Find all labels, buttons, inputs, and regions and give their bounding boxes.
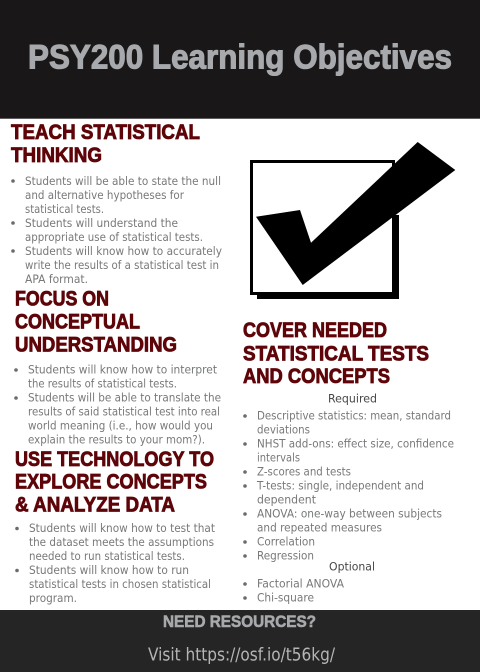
heading: cover needed statistical tests and concepts: STATISTICAL TESTS: [243, 342, 429, 366]
bullet list: statistical thinking objectives: write the results of a statistical test in: [25, 258, 219, 272]
subheading: optional: Optional: [329, 560, 375, 574]
bullet list: statistical thinking objectives: [11, 174, 222, 286]
bullet list: technology objectives: the dataset meets the assumptions: [29, 535, 214, 549]
bullet list: required topics: T-tests: single, independent and: [256, 478, 424, 492]
bullet list: required topics: [243, 408, 454, 562]
bullet list: conceptual understanding objectives: Students will know how to interpret: [28, 362, 217, 376]
bullet list: technology objectives: [15, 521, 215, 605]
bullet list: conceptual understanding objectives: world meaning (i.e., how would you: [28, 418, 213, 432]
bullet list: technology objectives: statistical tests in chosen statistical: [29, 577, 211, 591]
bullet list: conceptual understanding objectives: [14, 362, 221, 446]
bullet list: optional topics: Factorial ANOVA: [257, 576, 344, 590]
bullet list: required topics: dependent: [257, 492, 316, 506]
icon: checked box: [252, 142, 455, 299]
heading: use technology: EXPLORE CONCEPTS: [15, 470, 207, 494]
bullet list: optional topics: Chi-square: [257, 590, 314, 604]
bullet list: required topics: NHST add-ons: effect size, confidence: [257, 436, 454, 450]
bullet list: statistical thinking objectives: appropriate use of statistical tests.: [25, 230, 203, 244]
heading: teach statistical thinking: TEACH STATISTICAL: [11, 120, 200, 144]
bullet list: required topics: Descriptive statistics: mean, standard: [257, 408, 451, 422]
bullet list: required topics: deviations: [257, 422, 310, 436]
panel: focus on conceptual understanding: [14, 287, 221, 446]
heading: use technology: & ANALYZE DATA: [15, 493, 175, 517]
bullet list: technology objectives: program.: [29, 591, 77, 605]
bullet list: conceptual understanding objectives: Students will be able to translate the: [28, 390, 221, 404]
heading: use technology: [15, 447, 214, 517]
bullet list: technology objectives: needed to run statistical tests.: [29, 549, 185, 563]
title: PSY200 Learning Objectives: [28, 38, 452, 76]
heading: cover needed statistical tests and concepts: AND CONCEPTS: [243, 364, 390, 388]
bullet list: conceptual understanding objectives: results of said statistical test into real: [28, 404, 220, 418]
bullet list: required topics: and repeated measures: [257, 520, 382, 534]
bullet list: statistical thinking objectives: APA format.: [25, 272, 88, 286]
footer banner: [0, 610, 480, 672]
heading: focus on conceptual understanding: UNDERSTANDING: [15, 333, 177, 357]
bullet list: required topics: Regression: [257, 548, 314, 562]
bullet list: conceptual understanding objectives: the results of statistical tests.: [28, 376, 177, 390]
panel: teach statistical thinking: [11, 120, 222, 286]
bullet list: optional topics: [243, 576, 344, 604]
heading: teach statistical thinking: THINKING: [11, 143, 102, 167]
bullet list: statistical thinking objectives: statistical tests.: [25, 202, 104, 216]
header banner: [0, 0, 480, 119]
heading: cover needed statistical tests and concepts: [243, 318, 429, 388]
bullet list: statistical thinking objectives: Students will understand the: [25, 216, 178, 230]
bullet list: technology objectives: Students will know how to test that: [29, 521, 215, 535]
footer link text: Visit https://osf.io/t56kg/: [148, 646, 335, 666]
bullet list: conceptual understanding objectives: explain the results to your mom?).: [28, 432, 205, 446]
bullet list: statistical thinking objectives: Students will be able to state the null: [25, 174, 221, 188]
heading: use technology: USE TECHNOLOGY TO: [15, 447, 214, 471]
bullet list: statistical thinking objectives: and alternative hypotheses for: [25, 188, 184, 202]
panel: use technology: [15, 447, 215, 605]
bullet list: required topics: Correlation: [257, 534, 315, 548]
subheading: required: Required: [328, 392, 377, 406]
heading: focus on conceptual understanding: FOCUS ON: [15, 287, 109, 311]
heading: teach statistical thinking: [11, 120, 200, 167]
footer heading: need resources: NEED RESOURCES?: [163, 613, 316, 631]
bullet list: required topics: Z-scores and tests: [257, 464, 351, 478]
panel: cover needed statistical tests: [243, 318, 454, 604]
heading: focus on conceptual understanding: CONCEPTUAL: [15, 310, 140, 334]
heading: focus on conceptual understanding: [15, 287, 177, 357]
bullet list: required topics: intervals: [257, 450, 300, 464]
bullet list: required topics: ANOVA: one-way between subjects: [257, 506, 442, 520]
bullet list: statistical thinking objectives: Students will know how to accurately: [25, 244, 222, 258]
bullet list: technology objectives: Students will know how to run: [29, 563, 189, 577]
heading: cover needed statistical tests and concepts: COVER NEEDED: [243, 318, 387, 342]
